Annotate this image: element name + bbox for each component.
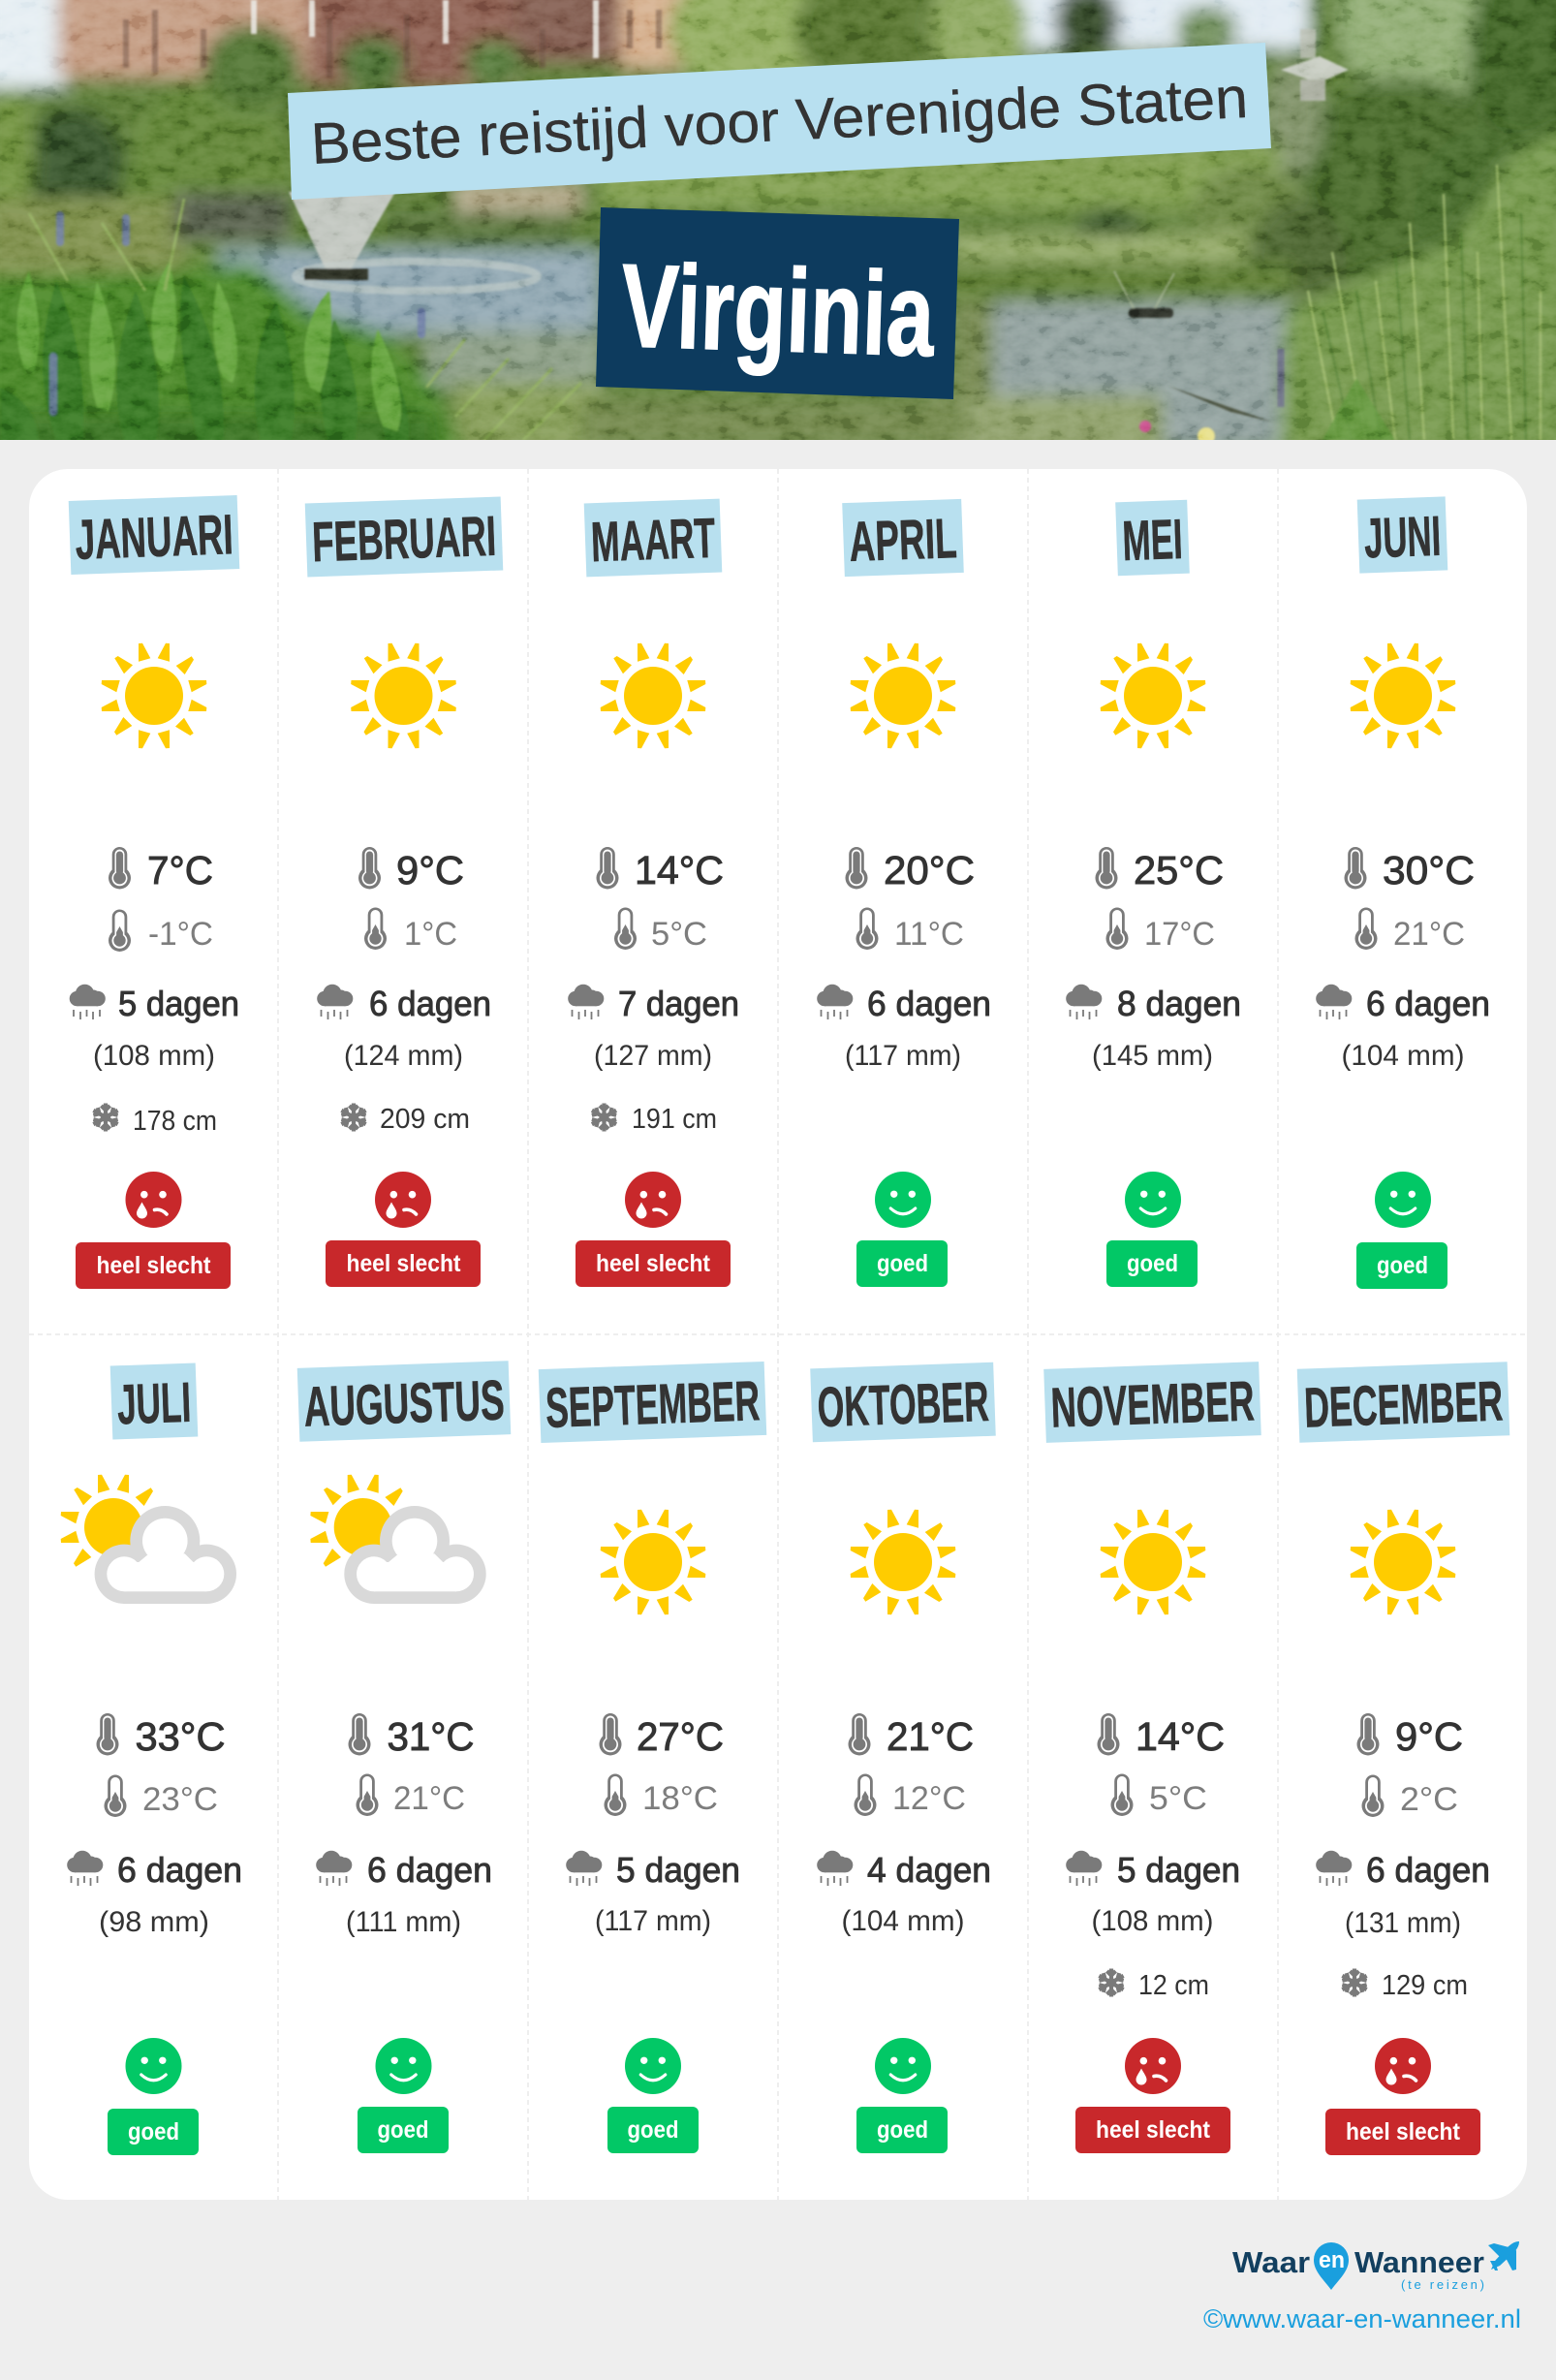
rain days: 6 dagen <box>367 1850 492 1890</box>
icon: sun <box>1351 643 1455 748</box>
icon: thermometer high <box>849 1713 870 1755</box>
max temperature: 25°C <box>1134 848 1224 892</box>
icon: sad face <box>126 1172 182 1228</box>
logo tagline: (te reizen) <box>1401 2277 1484 2292</box>
icon: sun <box>351 643 456 748</box>
rating badge <box>1075 2107 1230 2153</box>
month label <box>69 495 239 575</box>
photo: Virginia pond with fountain <box>0 0 1556 465</box>
month: oktober <box>810 1362 996 2153</box>
max temperature: 20°C <box>884 848 975 892</box>
month label <box>297 1361 511 1442</box>
logo: Waar en Wanneer <box>1232 2241 1519 2292</box>
icon: thermometer high <box>349 1713 370 1755</box>
icon: rain <box>1066 1851 1102 1886</box>
icon: thermometer low <box>1106 908 1128 950</box>
icon: thermometer low <box>855 1774 876 1816</box>
icon: thermometer high <box>97 1713 118 1755</box>
max temperature: 21°C <box>887 1714 974 1759</box>
icon: rain <box>1316 985 1352 1019</box>
rating badge <box>326 1240 481 1287</box>
month label <box>1115 500 1190 576</box>
rainfall: (127 mm) <box>594 1040 712 1072</box>
max temperature: 7°C <box>147 848 213 892</box>
icon: sad face <box>375 1172 431 1228</box>
max temperature: 31°C <box>388 1714 475 1759</box>
rain days: 4 dagen <box>867 1850 991 1890</box>
rain days: 5 dagen <box>118 984 239 1023</box>
month label <box>584 499 722 577</box>
icon: rain <box>317 985 353 1019</box>
icon: sad face <box>1375 2038 1431 2094</box>
rating badge: heel slecht <box>596 1250 711 1277</box>
rating badge: goed <box>128 2118 179 2145</box>
rainfall: (111 mm) <box>346 1906 461 1938</box>
snowfall: 129 cm <box>1382 1970 1468 2001</box>
month label <box>810 1362 996 1442</box>
icon: happy face <box>1375 1172 1431 1228</box>
icon: thermometer high <box>109 847 131 889</box>
icon: rain <box>316 1851 352 1886</box>
icon: thermometer low <box>357 1774 378 1816</box>
icon: snow <box>590 1103 618 1132</box>
rating badge <box>856 1240 948 1287</box>
icon: thermometer low <box>856 908 878 950</box>
rain days: 6 dagen <box>867 984 991 1023</box>
snowfall: 178 cm <box>133 1106 217 1137</box>
rating badge <box>576 1240 731 1287</box>
rain days: 7 dagen <box>618 984 739 1023</box>
icon: rain <box>1316 1851 1352 1886</box>
state label: Virginia <box>596 207 959 399</box>
rating badge <box>1106 1240 1198 1287</box>
rating badge: goed <box>1377 1252 1428 1279</box>
icon: snow <box>339 1103 368 1132</box>
rainfall: (131 mm) <box>1345 1907 1461 1939</box>
rainfall: (117 mm) <box>845 1040 961 1072</box>
icon: rain <box>1066 985 1102 1019</box>
icon: thermometer high <box>1097 1713 1120 1755</box>
month label: APRIL <box>848 507 958 574</box>
rain days: 6 dagen <box>1366 984 1490 1023</box>
month label <box>1357 496 1447 574</box>
max temperature: 30°C <box>1383 848 1475 892</box>
icon: thermometer high <box>597 847 618 889</box>
month label: JUNI <box>1363 505 1442 570</box>
icon: sun <box>1101 1510 1205 1614</box>
icon: thermometer low <box>614 908 637 950</box>
month: januari <box>69 495 239 1289</box>
min temperature: 17°C <box>1144 916 1215 953</box>
rating badge: goed <box>877 1250 928 1277</box>
month label: AUGUSTUS <box>303 1368 506 1439</box>
icon: snow <box>1340 1969 1369 1996</box>
max temperature: 27°C <box>637 1714 724 1759</box>
logo word: en: en <box>1319 2247 1345 2273</box>
rating badge: goed <box>877 2116 928 2144</box>
month: februari <box>305 496 503 1287</box>
state label: Virginia: Virginia <box>619 239 937 381</box>
icon: thermometer high <box>1356 1713 1380 1755</box>
month label: OKTOBER <box>817 1370 990 1439</box>
rating badge <box>108 2109 199 2155</box>
min temperature: 1°C <box>404 916 457 953</box>
rain days: 6 dagen <box>369 984 491 1023</box>
rating badge <box>607 2107 699 2153</box>
icon: happy face <box>1125 1172 1181 1228</box>
rainfall: (98 mm) <box>99 1906 209 1938</box>
rainfall: (104 mm) <box>841 1905 965 1937</box>
min temperature: 21°C <box>1393 916 1465 953</box>
icon: rain <box>67 1851 103 1886</box>
icon: thermometer low <box>1110 1774 1134 1816</box>
rating badge: goed <box>1127 1250 1178 1277</box>
icon: happy face <box>625 2038 681 2094</box>
icon: thermometer high <box>845 847 868 889</box>
icon: sad face <box>625 1172 681 1228</box>
heading banner <box>288 43 1271 200</box>
icon: snow <box>1097 1969 1126 1996</box>
rain days: 8 dagen <box>1117 984 1241 1023</box>
month label <box>305 496 503 578</box>
icon: sun <box>1101 643 1205 748</box>
max temperature: 33°C <box>136 1714 225 1759</box>
icon: happy face <box>875 1172 931 1228</box>
max temperature: 9°C <box>1395 1714 1463 1759</box>
min temperature: -1°C <box>148 916 213 953</box>
rating badge <box>1356 1242 1447 1289</box>
icon: thermometer high <box>1095 847 1118 889</box>
month label <box>1043 1362 1261 1443</box>
rainfall: (108 mm) <box>93 1040 215 1072</box>
icon: snow <box>91 1103 120 1132</box>
rainfall: (108 mm) <box>1091 1905 1213 1937</box>
logo word: Wanneer: Wanneer <box>1354 2245 1484 2279</box>
icon: thermometer high <box>599 1713 622 1755</box>
min temperature: 5°C <box>1149 1780 1207 1817</box>
max temperature: 14°C <box>1136 1714 1225 1759</box>
month: december <box>1297 1362 1509 2155</box>
snowfall: 12 cm <box>1138 1970 1209 2001</box>
icon: sun behind cloud <box>310 1475 486 1604</box>
icon: sun <box>851 643 955 748</box>
icon: thermometer low <box>364 908 387 950</box>
panel: month grid <box>29 469 1527 2200</box>
icon: thermometer low <box>1362 1775 1384 1817</box>
min temperature: 11°C <box>894 916 964 953</box>
icon: rain <box>566 1851 602 1886</box>
icon: happy face <box>875 2038 931 2094</box>
month: augustus <box>297 1361 511 2153</box>
icon: map pin <box>1314 2242 1349 2290</box>
rating badge <box>1325 2109 1480 2155</box>
max temperature: 9°C <box>396 848 464 892</box>
month label: NOVEMBER <box>1050 1369 1256 1440</box>
icon: sad face <box>1125 2038 1181 2094</box>
min temperature: 21°C <box>393 1780 465 1817</box>
logo word: Waar: Waar <box>1232 2245 1310 2279</box>
month: juli <box>61 1362 242 2155</box>
min temperature: 2°C <box>1400 1781 1458 1818</box>
month: mei <box>1066 500 1241 1287</box>
month: november <box>1043 1362 1261 2153</box>
icon: rain <box>817 1851 853 1886</box>
icon: thermometer high <box>1345 847 1366 889</box>
max temperature: 14°C <box>635 848 724 892</box>
month label: JANUARI <box>75 503 234 572</box>
icon: sun <box>102 643 206 748</box>
icon: sun <box>601 1510 705 1614</box>
rating badge: heel slecht <box>1096 2116 1211 2144</box>
rainfall: (145 mm) <box>1092 1040 1213 1072</box>
icon: happy face <box>376 2038 432 2094</box>
icon: rain <box>70 985 106 1019</box>
month label: MEI <box>1121 508 1184 573</box>
rating badge <box>856 2107 948 2153</box>
snowfall: 191 cm <box>632 1104 717 1135</box>
icon: happy face <box>126 2038 182 2094</box>
icon: thermometer low <box>605 1774 626 1816</box>
month label: SEPTEMBER <box>545 1369 761 1440</box>
icon: thermometer low <box>1354 908 1378 950</box>
icon: thermometer low <box>109 910 131 952</box>
rain days: 6 dagen <box>117 1850 242 1890</box>
min temperature: 5°C <box>651 916 707 953</box>
month: september <box>539 1362 766 2153</box>
rain days: 6 dagen <box>1366 1850 1490 1890</box>
icon: sun <box>1351 1510 1455 1614</box>
icon: thermometer low <box>105 1775 126 1817</box>
rating badge <box>358 2107 449 2153</box>
icon: thermometer high <box>358 847 381 889</box>
min temperature: 23°C <box>142 1781 218 1818</box>
icon: plane <box>1488 2241 1519 2270</box>
month: april <box>817 499 991 1287</box>
rain days: 5 dagen <box>616 1850 740 1890</box>
rating badge: heel slecht <box>347 1250 461 1277</box>
icon: sun behind cloud <box>61 1475 236 1604</box>
min temperature: 18°C <box>642 1780 718 1817</box>
icon: sun <box>851 1510 955 1614</box>
month label: FEBRUARI <box>311 505 497 574</box>
month: maart <box>568 499 739 1287</box>
icon: rain <box>568 985 604 1019</box>
month label <box>110 1362 198 1440</box>
month label <box>842 499 964 577</box>
rating badge: goed <box>378 2116 428 2144</box>
month label <box>539 1362 766 1443</box>
month label: MAART <box>590 507 716 574</box>
fountain plume <box>289 192 395 269</box>
month label: JULI <box>116 1371 192 1436</box>
rainfall: (104 mm) <box>1341 1040 1465 1072</box>
rating badge: goed <box>628 2116 678 2144</box>
title: Beste reistijd voor Verenigde Staten <box>309 65 1249 176</box>
rainfall: (117 mm) <box>595 1905 711 1937</box>
copyright url: ©www.waar-en-wanneer.nl <box>1203 2304 1521 2333</box>
icon: rain <box>817 985 853 1019</box>
icon: sun <box>601 643 705 748</box>
rain days: 5 dagen <box>1117 1850 1240 1890</box>
rating badge: heel slecht <box>97 1252 211 1279</box>
snowfall: 209 cm <box>380 1104 470 1135</box>
rating badge <box>76 1242 231 1289</box>
min temperature: 12°C <box>892 1780 966 1817</box>
month: juni <box>1316 496 1490 1289</box>
rainfall: (124 mm) <box>344 1040 463 1072</box>
rating badge: heel slecht <box>1346 2118 1461 2145</box>
